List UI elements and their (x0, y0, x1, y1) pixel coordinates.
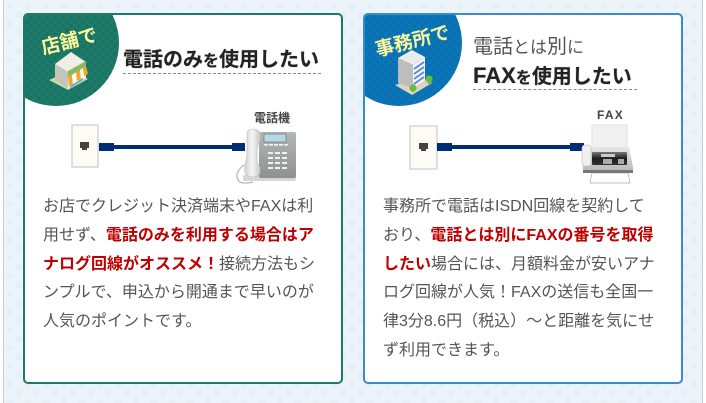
body text: ず利用できます。 (383, 342, 509, 359)
badge label: office: 事務所で (373, 22, 452, 61)
heading second line: FAXを使用したい (473, 63, 632, 88)
body text: ログ回線が人気！FAXの送信も全国一 (383, 284, 653, 301)
heading underline (123, 73, 321, 74)
body text (43, 197, 315, 330)
body text: 人気のポイントです。 (43, 313, 201, 330)
heading: 電話とは別に (473, 36, 584, 58)
body text (383, 197, 655, 359)
icon: wall jack (72, 125, 98, 167)
icon: shop building (49, 52, 88, 90)
icon: office building (395, 50, 433, 95)
heading: 電話のみを使用したい (123, 49, 319, 71)
body text: ナログ回線がオススメ！接続方法もシ (43, 256, 315, 273)
body text: おり、電話とは別にFAXの番号を取得 (383, 227, 654, 244)
blue corner badge (336, 0, 462, 106)
line cable (99, 143, 245, 151)
line cable (437, 143, 584, 151)
body text: したい場合には、月額料金が安いアナ (383, 256, 655, 273)
heading underline (473, 89, 637, 90)
badge label: store: 店舗で (39, 25, 100, 59)
caption: telephone: 電話機 (254, 111, 290, 125)
caption: FAX: FAX (597, 108, 624, 122)
diagram: wall jack to telephone (71, 124, 296, 184)
body text: ンプルで、申込から開通まで早いのが (43, 284, 314, 301)
body text: 事務所で電話はISDN回線を契約して (383, 198, 645, 215)
icon: fax machine (582, 125, 633, 183)
panel: office (363, 13, 683, 384)
panel: store (23, 13, 343, 384)
body text: お店でクレジット決済端末やFAXは利 (43, 198, 313, 215)
icon: telephone (237, 129, 296, 183)
body text: 用せず、電話のみを利用する場合はア (43, 227, 314, 244)
diagram: wall jack to fax (409, 124, 633, 184)
green corner badge (0, 0, 119, 106)
icon: wall jack (410, 126, 437, 169)
body text: 律3分8.6円（税込）～と距離を気にせ (383, 313, 654, 330)
